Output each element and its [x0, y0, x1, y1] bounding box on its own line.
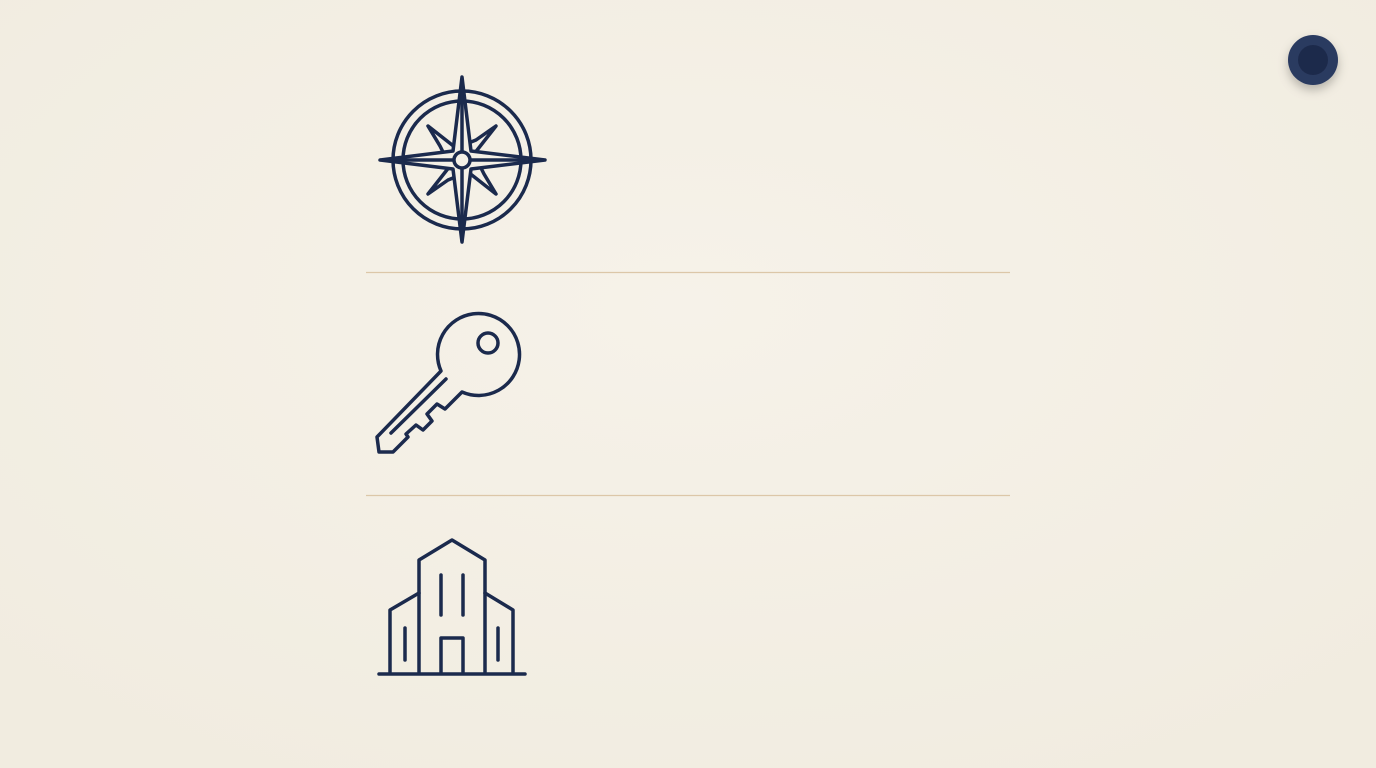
icon: building	[379, 540, 525, 674]
icon: compass	[380, 77, 545, 242]
icon: dark button	[1288, 35, 1338, 85]
icon: key	[377, 313, 520, 452]
